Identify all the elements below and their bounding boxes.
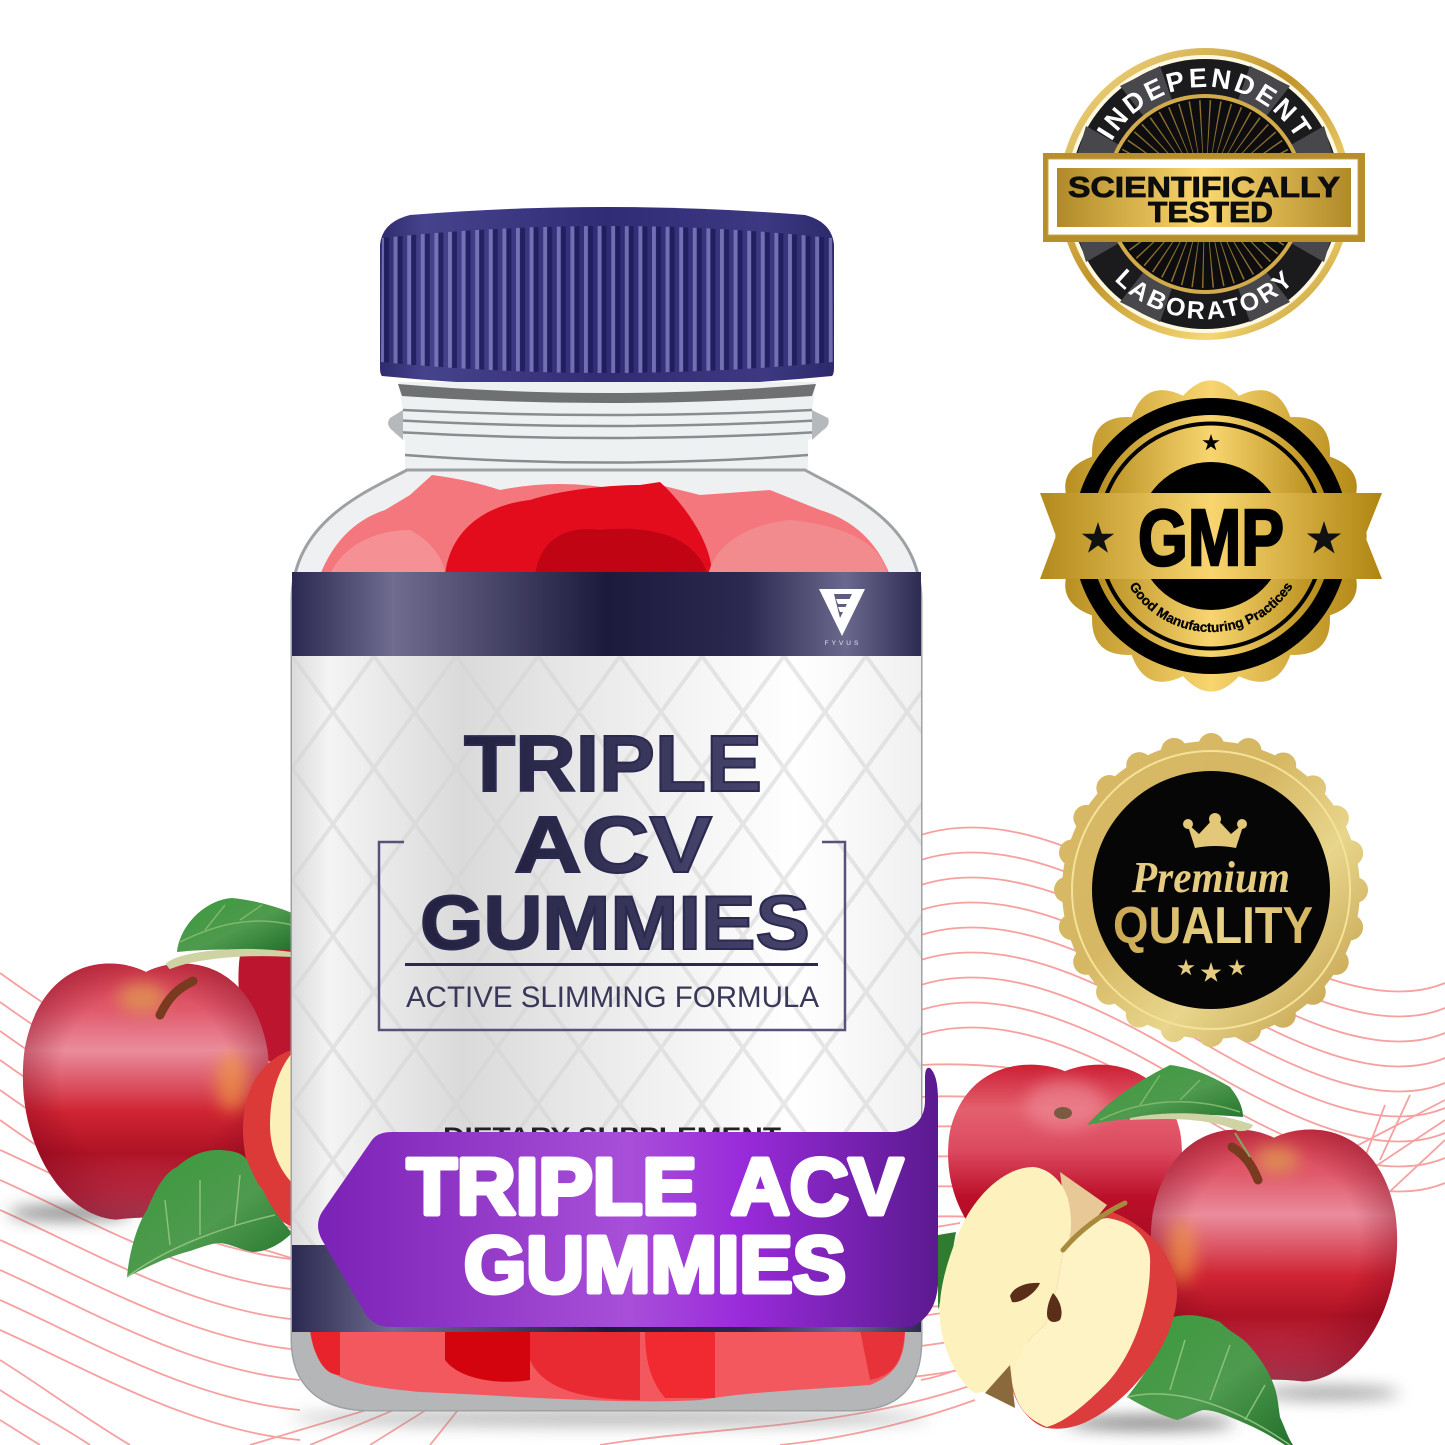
leaf bottom left	[127, 1150, 292, 1277]
gummies	[310, 475, 905, 1401]
label title	[420, 719, 810, 966]
sunburst rays	[1145, 134, 1265, 254]
calyx	[985, 1365, 1015, 1408]
apple back right	[1151, 1129, 1397, 1382]
star top	[1202, 434, 1220, 450]
flesh left lobe	[940, 1167, 1071, 1393]
purple banner	[318, 1068, 938, 1327]
leaf top right	[1087, 1065, 1253, 1157]
skin wedge	[1060, 1172, 1107, 1250]
label title: ACV	[514, 800, 712, 889]
bottom navy band	[292, 1245, 921, 1332]
seeds	[1010, 1283, 1062, 1322]
apple large	[23, 964, 269, 1220]
jar base tint	[292, 1330, 921, 1410]
arc text laboratory: LABORATORY	[1115, 268, 1289, 320]
stem	[1063, 1203, 1125, 1250]
small leaf	[938, 1232, 956, 1310]
label frame	[379, 842, 845, 1030]
neck glass	[388, 382, 829, 474]
brand logo	[819, 589, 865, 647]
jar body glass	[292, 470, 921, 1410]
banner title: TRIPLE ACV	[407, 1142, 903, 1231]
label title: TRIPLE	[464, 719, 762, 808]
crown	[1183, 813, 1247, 848]
left apple group	[23, 898, 332, 1277]
gold ribbon	[1043, 153, 1365, 242]
arc text independent: INDEPENDENT	[1096, 68, 1312, 140]
dietary supplement text: DIETARY SUPPLEMENT	[443, 1123, 781, 1150]
scalloped seal	[1062, 741, 1360, 1039]
white label	[292, 656, 921, 1246]
leaf bottom right	[1127, 1315, 1293, 1445]
GMP heading: GMP	[1138, 493, 1284, 582]
background wave lines	[0, 827, 1445, 1445]
ribbon stars	[1082, 521, 1341, 554]
top navy band	[292, 572, 921, 657]
flesh right lobe	[1012, 1218, 1150, 1427]
cap	[380, 207, 834, 387]
gold ribbon: TESTED	[1148, 197, 1273, 229]
brand logo: FYVUS	[825, 640, 861, 647]
stars row	[1177, 959, 1246, 982]
apple behind	[238, 912, 332, 1063]
halved apple left	[243, 1050, 292, 1227]
ribbon	[1040, 493, 1382, 579]
banner title	[407, 1142, 903, 1309]
premium script: Premium	[1131, 853, 1290, 902]
right apple group	[938, 1065, 1397, 1445]
scalloped seal	[1055, 380, 1367, 692]
apple back left	[948, 1065, 1182, 1267]
halved apple	[940, 1167, 1177, 1429]
ground shadows	[8, 1207, 1400, 1429]
badge disc	[1059, 48, 1351, 340]
banner title: GUMMIES	[464, 1220, 846, 1309]
red rim	[1012, 1210, 1177, 1429]
arc text good manufacturing practices: Good Manufacturing Practices	[1130, 582, 1292, 632]
badge: premium quality	[1062, 741, 1360, 1039]
label rule	[405, 963, 818, 966]
label title: GUMMIES	[420, 881, 810, 966]
leaf top left	[167, 898, 292, 968]
gold ribbon: SCIENTIFICALLY	[1068, 172, 1340, 204]
label subtitle: ACTIVE SLIMMING FORMULA	[406, 981, 819, 1014]
badge: GMP	[1040, 380, 1382, 692]
badge: scientifically tested	[1043, 48, 1365, 340]
quality heading: QUALITY	[1113, 897, 1313, 955]
product jar	[292, 207, 921, 1410]
